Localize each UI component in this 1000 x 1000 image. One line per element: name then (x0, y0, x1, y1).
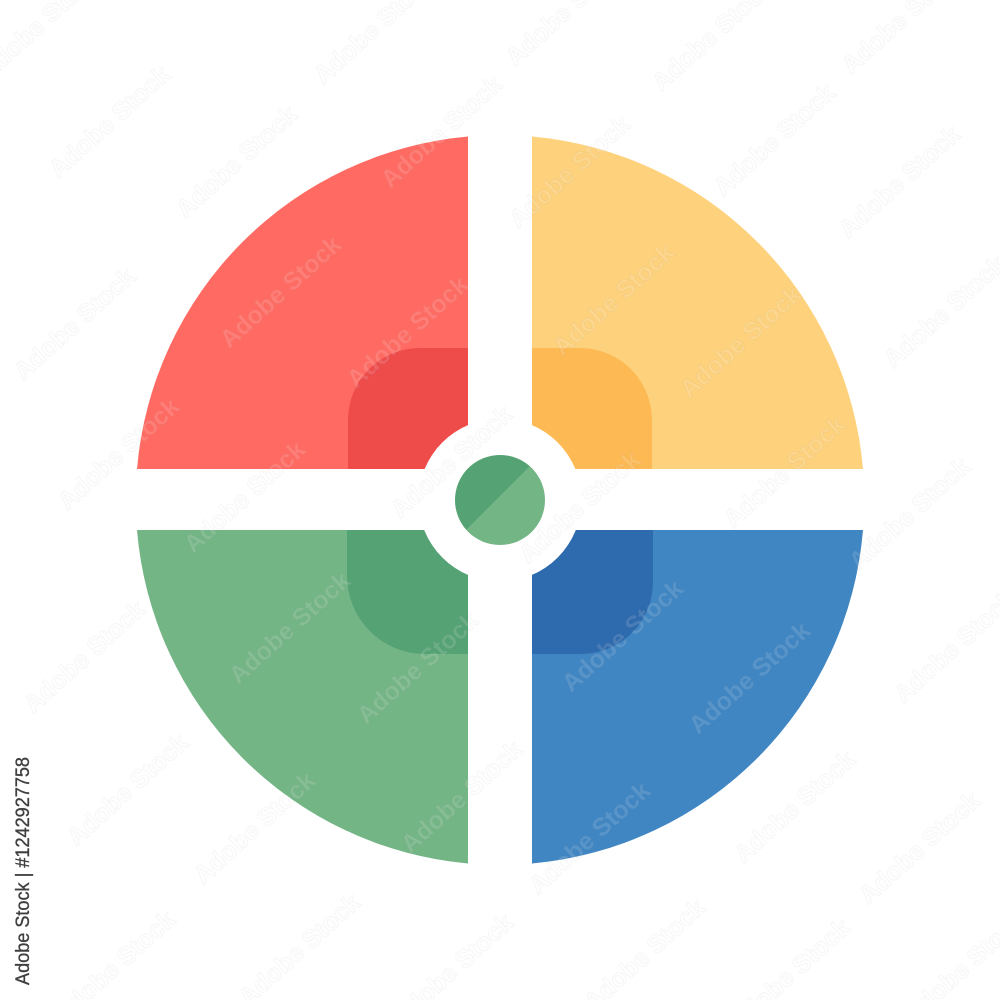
watermark pattern: Adobe Stock (44, 60, 176, 184)
watermark pattern: Adobe Stock (215, 230, 347, 354)
watermark pattern: Adobe Stock (62, 728, 194, 852)
watermark pattern: Adobe Stock (524, 776, 656, 900)
quadrant: blue (532, 530, 863, 864)
watermark pattern: Adobe Stock (376, 70, 508, 194)
watermark pattern: Adobe Stock (53, 392, 185, 516)
circular quadrant diagram (137, 136, 863, 864)
watermark pattern: Adobe Stock (729, 745, 861, 869)
watermark pattern: Adobe Stock (171, 100, 303, 224)
quadrant: red (137, 136, 468, 469)
watermark pattern: Adobe Stock (844, 452, 976, 576)
watermark pattern: Adobe Stock (557, 574, 689, 698)
watermark pattern: Adobe Stock (342, 270, 474, 394)
quadrant: green (137, 530, 468, 864)
watermark pattern: Adobe Stock (396, 735, 528, 859)
watermark pattern: Adobe Stock (179, 435, 311, 559)
watermark pattern: Adobe Stock (224, 566, 356, 690)
watermark pattern: Adobe Stock (854, 786, 986, 910)
watermark pattern: Adobe Stock (386, 400, 518, 524)
stock id caption: Adobe Stock | #1242927758 (13, 757, 34, 985)
watermark pattern: Adobe Stock (709, 78, 841, 202)
watermark pattern: Adobe Stock (19, 595, 151, 719)
watermark pattern: Adobe Stock (352, 606, 484, 730)
watermark pattern: Adobe Stock (9, 262, 141, 386)
watermark pattern: Adobe Stock (514, 445, 646, 569)
center dot (455, 455, 545, 545)
watermark pattern: Adobe Stock (675, 280, 807, 404)
watermark pattern: Adobe Stock (548, 238, 680, 362)
center white ring (418, 418, 582, 582)
watermark pattern: Adobe Stock (189, 766, 321, 890)
quadrant: yellow (532, 136, 863, 469)
watermark pattern: Adobe Stock (504, 110, 636, 234)
watermark pattern: Adobe Stock (719, 410, 851, 534)
watermark pattern: Adobe Stock (684, 616, 816, 740)
watermark pattern: Adobe Stock (834, 120, 966, 244)
